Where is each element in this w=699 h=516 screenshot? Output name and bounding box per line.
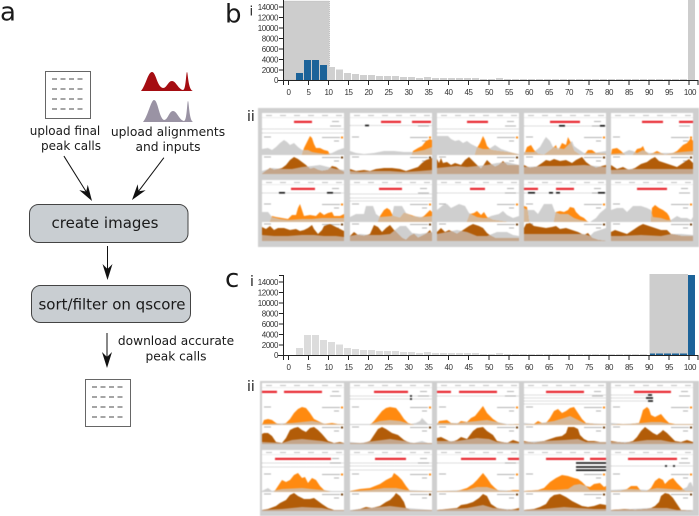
label: b i: i (250, 4, 253, 20)
x axis labels (286, 88, 697, 97)
label: download accurate peak calls: download accurate (118, 334, 234, 348)
axes (278, 0, 698, 85)
x axis labels: 90 (645, 88, 654, 97)
y axis labels: 10000 (258, 299, 279, 308)
x axis labels: 75 (585, 363, 594, 372)
x axis labels (286, 363, 697, 372)
y axis labels: 12000 (258, 288, 279, 298)
blue selected bars (296, 60, 327, 80)
tile c5 (611, 383, 693, 444)
x axis labels: 70 (565, 363, 574, 372)
tile b5 (611, 113, 693, 174)
box: sort/filter on qscore (32, 286, 190, 322)
x axis labels: 70 (565, 88, 574, 97)
tile b3 (437, 113, 519, 174)
icon: alignment peaks (141, 72, 193, 122)
box: create images (30, 204, 188, 242)
label: upload alignments and inputs: and inputs (135, 140, 201, 154)
panel a: workflow (0, 0, 234, 426)
label: c ii: ii (247, 379, 255, 395)
grey bars (328, 67, 687, 80)
selection region (284, 1, 330, 80)
tile c3 (437, 383, 519, 444)
box: create images: create images (52, 214, 159, 232)
histogram b i (258, 0, 698, 97)
x axis labels: 30 (404, 363, 413, 372)
x axis labels: 50 (485, 363, 494, 372)
tile c9 (524, 450, 606, 511)
x axis labels: 5 (306, 363, 311, 372)
grey bars (296, 335, 647, 355)
x axis labels: 30 (404, 88, 413, 97)
tile c6 (262, 450, 344, 511)
y axis labels: 4000 (262, 56, 279, 64)
x axis labels: 15 (344, 363, 353, 372)
x axis labels: 45 (464, 363, 473, 372)
arrow: create images to sort (102, 246, 112, 280)
x axis labels: 5 (306, 88, 311, 97)
x axis labels: 50 (485, 88, 494, 97)
x axis labels: 0 (286, 88, 291, 97)
x axis labels: 15 (344, 88, 353, 97)
tile b8 (437, 180, 519, 241)
blue selected bars (650, 275, 695, 355)
tile b2 (350, 113, 432, 174)
y axis labels: 10000 (258, 24, 279, 33)
y axis labels: 12000 (258, 14, 279, 22)
x axis labels: 85 (625, 88, 634, 97)
tile c4 (524, 383, 606, 444)
x axis labels: 40 (444, 88, 453, 97)
y axis labels: 0 (274, 76, 279, 85)
x axis labels: 60 (525, 88, 534, 97)
x axis labels: 25 (384, 88, 393, 97)
y axis labels: 8000 (262, 310, 279, 318)
x axis labels: 35 (424, 363, 433, 372)
x axis labels: 25 (384, 363, 393, 372)
panel: b ii low-quality peak images (258, 108, 699, 247)
selection region (650, 274, 688, 355)
x axis labels: 10 (324, 88, 333, 97)
label: upload final peak calls: upload final (30, 124, 100, 138)
label: download accurate peak calls: peak calls (146, 350, 206, 364)
panel letter c: c (225, 264, 239, 294)
icon: peak calls document (46, 72, 90, 118)
y axis labels (258, 278, 279, 360)
box: sort/filter on qscore: sort/filter on qscore (38, 296, 186, 314)
tile b10 (611, 180, 693, 241)
bar at 100 (688, 0, 695, 80)
label: c i numeral: i (250, 274, 254, 290)
y axis labels (258, 3, 279, 85)
tile b1 (262, 113, 344, 174)
axes (278, 275, 698, 360)
panel letter b: b (225, 0, 242, 30)
tile c10 (611, 450, 693, 511)
x axis labels: 55 (505, 363, 514, 372)
tile b6 (262, 180, 344, 241)
label: upload alignments and inputs: upload alignments (111, 125, 225, 139)
tile c1 (262, 383, 344, 444)
y axis labels: 14000 (258, 278, 279, 287)
x axis labels: 100 (684, 88, 697, 97)
x axis labels: 95 (665, 363, 674, 372)
x axis labels: 40 (444, 363, 453, 372)
icon: accurate peak calls document (86, 380, 130, 426)
label: b ii: ii (247, 109, 255, 125)
y axis labels: 6000 (262, 45, 279, 54)
y axis labels: 6000 (262, 320, 279, 329)
y axis labels: 0 (274, 351, 279, 360)
x axis labels: 75 (585, 88, 594, 97)
panel: c ii high-quality peak images (260, 381, 699, 516)
x axis labels: 20 (364, 88, 373, 97)
x axis labels: 10 (324, 363, 333, 372)
y axis labels: 2000 (262, 66, 279, 75)
x axis labels: 60 (525, 363, 534, 372)
tile c2 (350, 383, 432, 444)
tile c8 (437, 450, 519, 511)
x axis labels: 0 (286, 363, 291, 372)
tile b7 (350, 180, 432, 241)
x axis labels: 55 (505, 88, 514, 97)
x axis labels: 95 (665, 88, 674, 97)
y axis labels: 2000 (262, 341, 279, 350)
x axis labels: 85 (625, 363, 634, 372)
histogram c i (258, 274, 698, 372)
y axis labels: 14000 (258, 3, 279, 12)
arrow: alignments to create images (128, 155, 168, 203)
x axis labels: 45 (464, 88, 473, 97)
label: upload final peak calls: peak calls (41, 139, 101, 153)
x axis labels: 80 (605, 88, 614, 97)
x axis labels: 80 (605, 363, 614, 372)
y axis labels: 4000 (262, 330, 279, 340)
tile b4 (524, 113, 606, 174)
x axis labels: 65 (545, 363, 554, 372)
x axis labels: 90 (645, 363, 654, 372)
arrow: peak calls to create images (60, 153, 96, 204)
x axis labels: 35 (424, 88, 433, 97)
y axis labels: 8000 (262, 34, 279, 44)
tile c7 (350, 450, 432, 511)
tile b9 (524, 180, 606, 241)
arrow: sort to download (102, 333, 112, 368)
x axis labels: 20 (364, 363, 373, 372)
x axis labels: 100 (684, 363, 697, 372)
x axis labels: 65 (545, 88, 554, 97)
